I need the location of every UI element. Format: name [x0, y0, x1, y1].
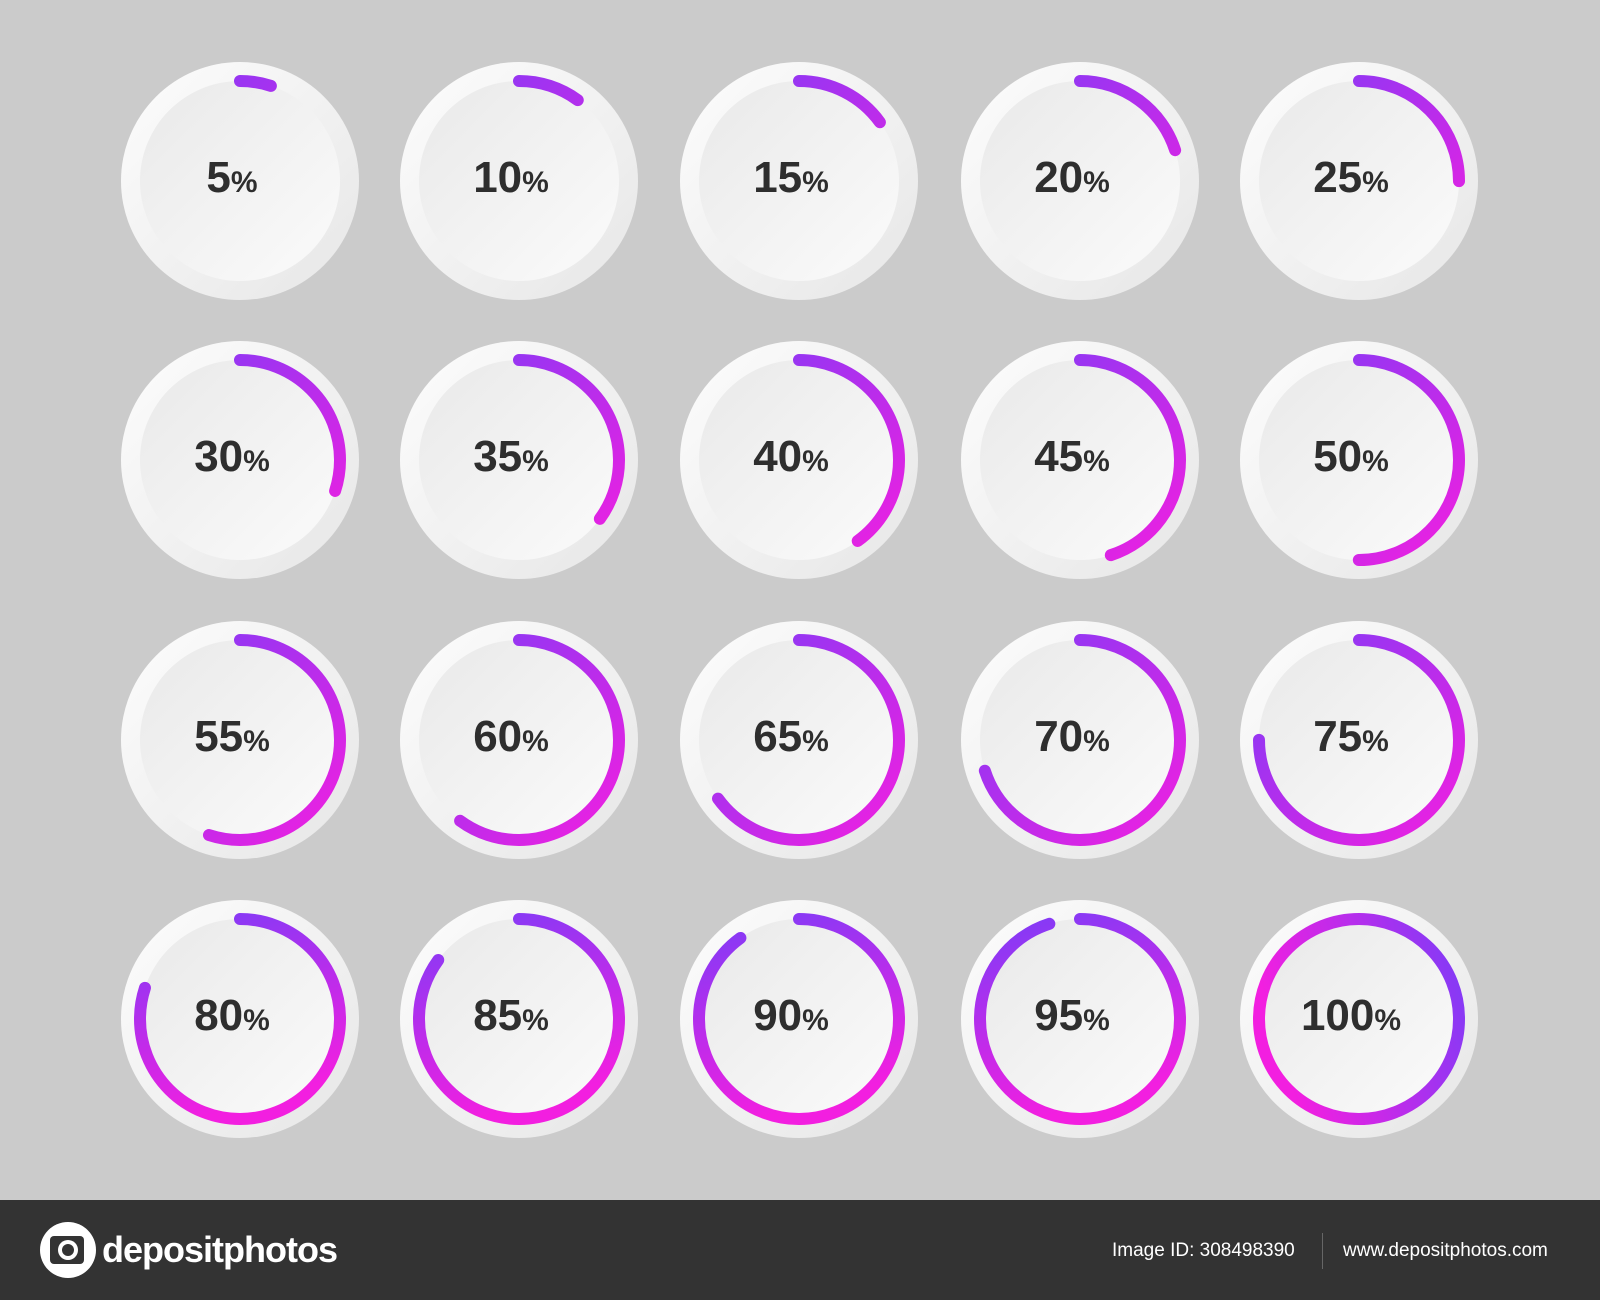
ring 25% — [1240, 62, 1478, 300]
ring 70% — [961, 621, 1199, 859]
ring 35% — [400, 341, 638, 579]
ring 95% — [961, 900, 1199, 1138]
ring 10% — [400, 62, 638, 300]
website: www.depositphotos.com — [1342, 1240, 1548, 1261]
ring 40% — [680, 341, 918, 579]
ring 60%: 60% — [473, 712, 549, 761]
ring 40%: 40% — [753, 432, 829, 481]
ring 35%: 35% — [473, 432, 549, 481]
ring 50%: 50% — [1313, 432, 1389, 481]
ring 25%: 25% — [1313, 153, 1389, 202]
ring 100% — [1240, 900, 1478, 1138]
ring 60% — [400, 621, 638, 859]
ring 100%: 100% — [1301, 991, 1401, 1040]
ring 30% — [121, 341, 359, 579]
ring 75%: 75% — [1313, 712, 1389, 761]
ring 55%: 55% — [194, 712, 270, 761]
ring 65% — [680, 621, 918, 859]
icon: camera logo — [40, 1222, 96, 1278]
ring 15% — [680, 62, 918, 300]
ring 65%: 65% — [753, 712, 829, 761]
ring 5% — [121, 62, 359, 300]
ring 85%: 85% — [473, 991, 549, 1040]
ring 55% — [121, 621, 359, 859]
ring 10%: 10% — [473, 153, 549, 202]
ring 90%: 90% — [753, 991, 829, 1040]
ring 30%: 30% — [194, 432, 270, 481]
footer bar — [0, 1200, 1600, 1300]
ring 85% — [400, 900, 638, 1138]
ring 80%: 80% — [194, 991, 270, 1040]
ring 95%: 95% — [1034, 991, 1110, 1040]
ring 50% — [1240, 341, 1478, 579]
ring 20% — [961, 62, 1199, 300]
image id: Image ID: 308498390 — [1112, 1240, 1295, 1261]
ring 20%: 20% — [1034, 153, 1110, 202]
ring 70%: 70% — [1034, 712, 1110, 761]
ring 75% — [1240, 621, 1478, 859]
ring 90% — [680, 900, 918, 1138]
ring 45%: 45% — [1034, 432, 1110, 481]
ring 5%: 5% — [206, 153, 258, 202]
ring 15%: 15% — [753, 153, 829, 202]
ring 80% — [121, 900, 359, 1138]
brand text: depositphotos — [102, 1229, 337, 1270]
ring 45% — [961, 341, 1199, 579]
